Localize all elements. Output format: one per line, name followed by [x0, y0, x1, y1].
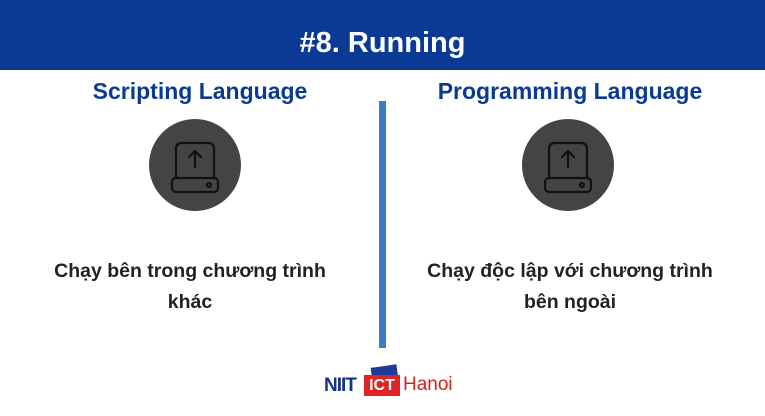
divider — [379, 101, 386, 348]
heading: scripting: Scripting Language — [93, 78, 307, 104]
text: right: Chạy độc lập với chương trình — [427, 260, 713, 282]
text: left — [54, 260, 326, 313]
text: right: bên ngoài — [524, 291, 616, 313]
header bar — [0, 0, 765, 70]
logo — [324, 364, 453, 396]
logo: NIIT — [324, 375, 356, 396]
text: left: khác — [168, 291, 212, 313]
icon: left drive — [149, 119, 241, 211]
text: left: Chạy bên trong chương trình — [54, 260, 326, 282]
logo: ICT — [369, 377, 395, 394]
logo: Hanoi — [403, 374, 453, 395]
icon: right drive — [522, 119, 614, 211]
header bar: #8. Running — [300, 27, 465, 59]
heading: programming: Programming Language — [438, 78, 702, 104]
text: right — [427, 260, 713, 313]
